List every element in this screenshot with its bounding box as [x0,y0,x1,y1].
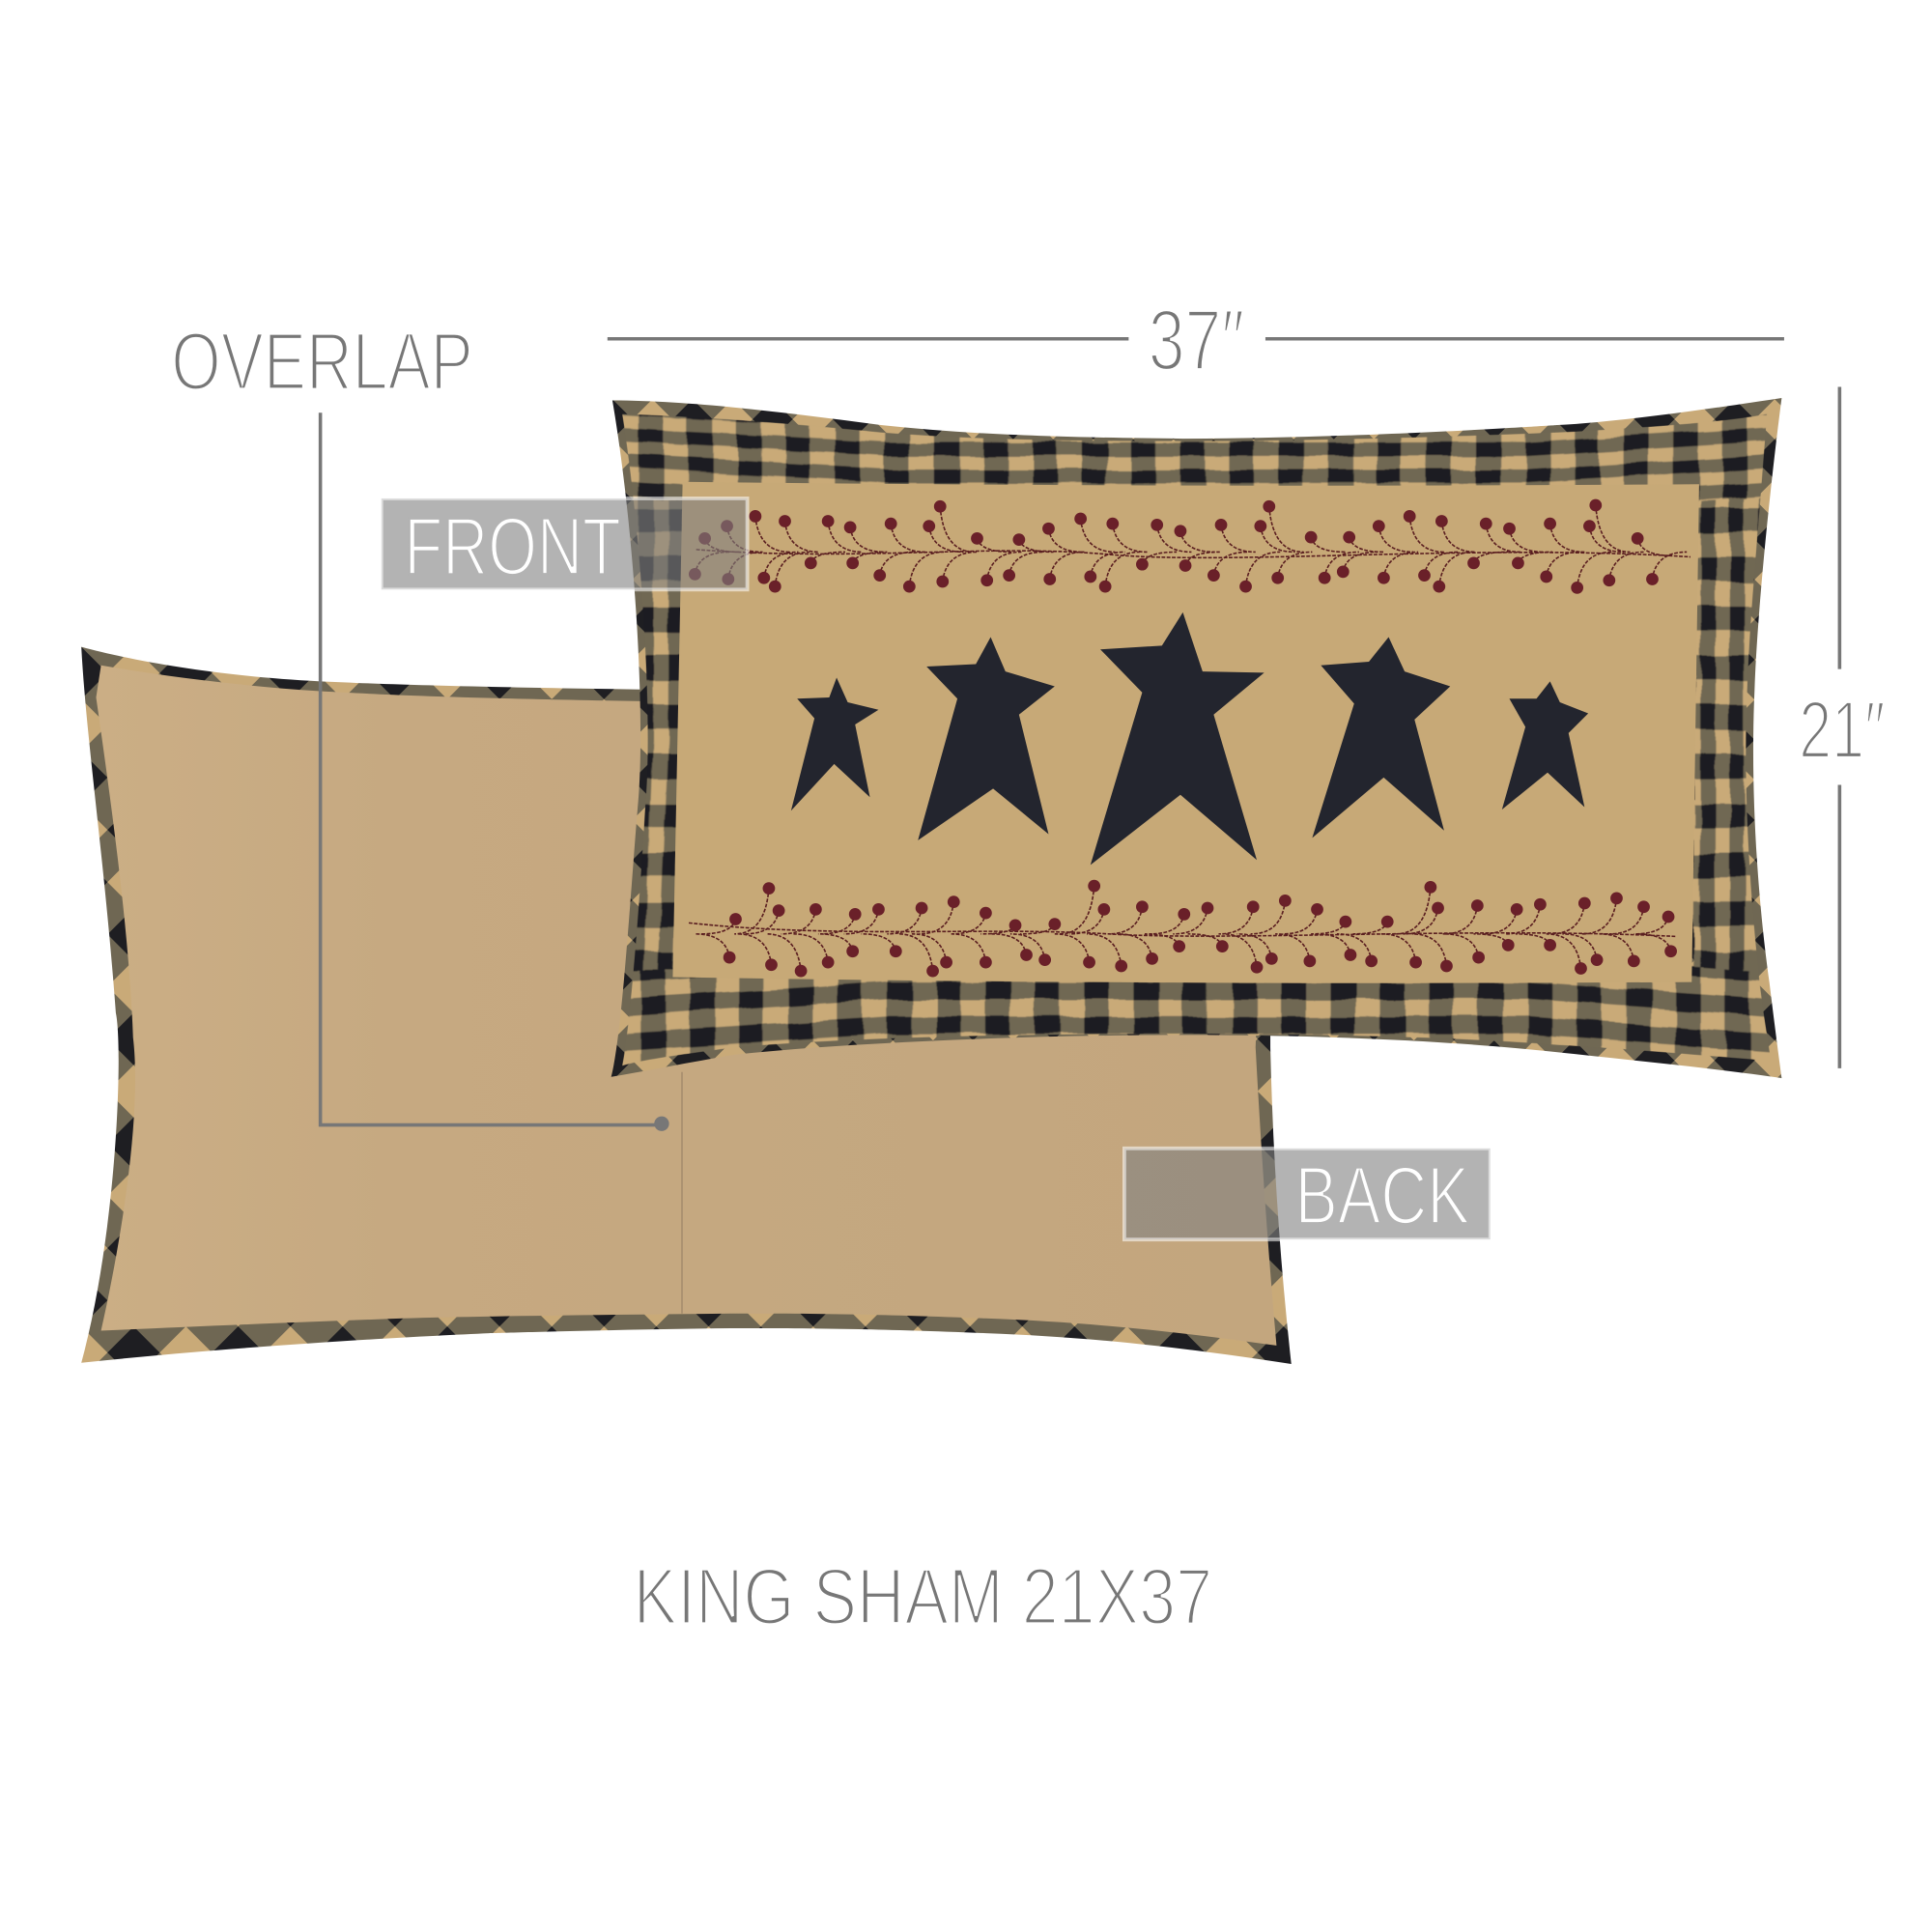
back sham diamond check border [81,647,1292,1364]
icon: five primitive stars [791,612,1588,865]
heading: overlap label: OVERLAP [171,316,473,407]
callout: back label: BACK [1295,1151,1470,1241]
top berry vine [695,505,1690,587]
dimension: height 21 inches: 21″ [1799,684,1886,775]
callout: front label: FRONT [404,500,621,591]
top vine stem and stitched twigs [695,505,1690,587]
dimension: width 37 inches: 37″ [1149,292,1244,388]
title: product size caption: KING SHAM 21X37 [634,1551,1212,1641]
back sham tan fabric [96,666,1276,1346]
back overlap seam [681,1072,683,1314]
front sham tan center panel [672,482,1699,983]
panel: back of sham [81,647,1292,1364]
panel: front of sham [589,384,1786,1096]
front sham outer diamond rim [611,398,1781,1078]
bottom vine berries [729,886,1671,971]
bottom berry vine [689,886,1676,971]
top vine berries [695,505,1652,587]
bottom vine stem and stitched twigs [689,886,1676,971]
callout: back label [1124,1149,1491,1241]
arrow: overlap callout line with dot [321,412,669,1131]
front sham gingham border [622,413,1770,1066]
